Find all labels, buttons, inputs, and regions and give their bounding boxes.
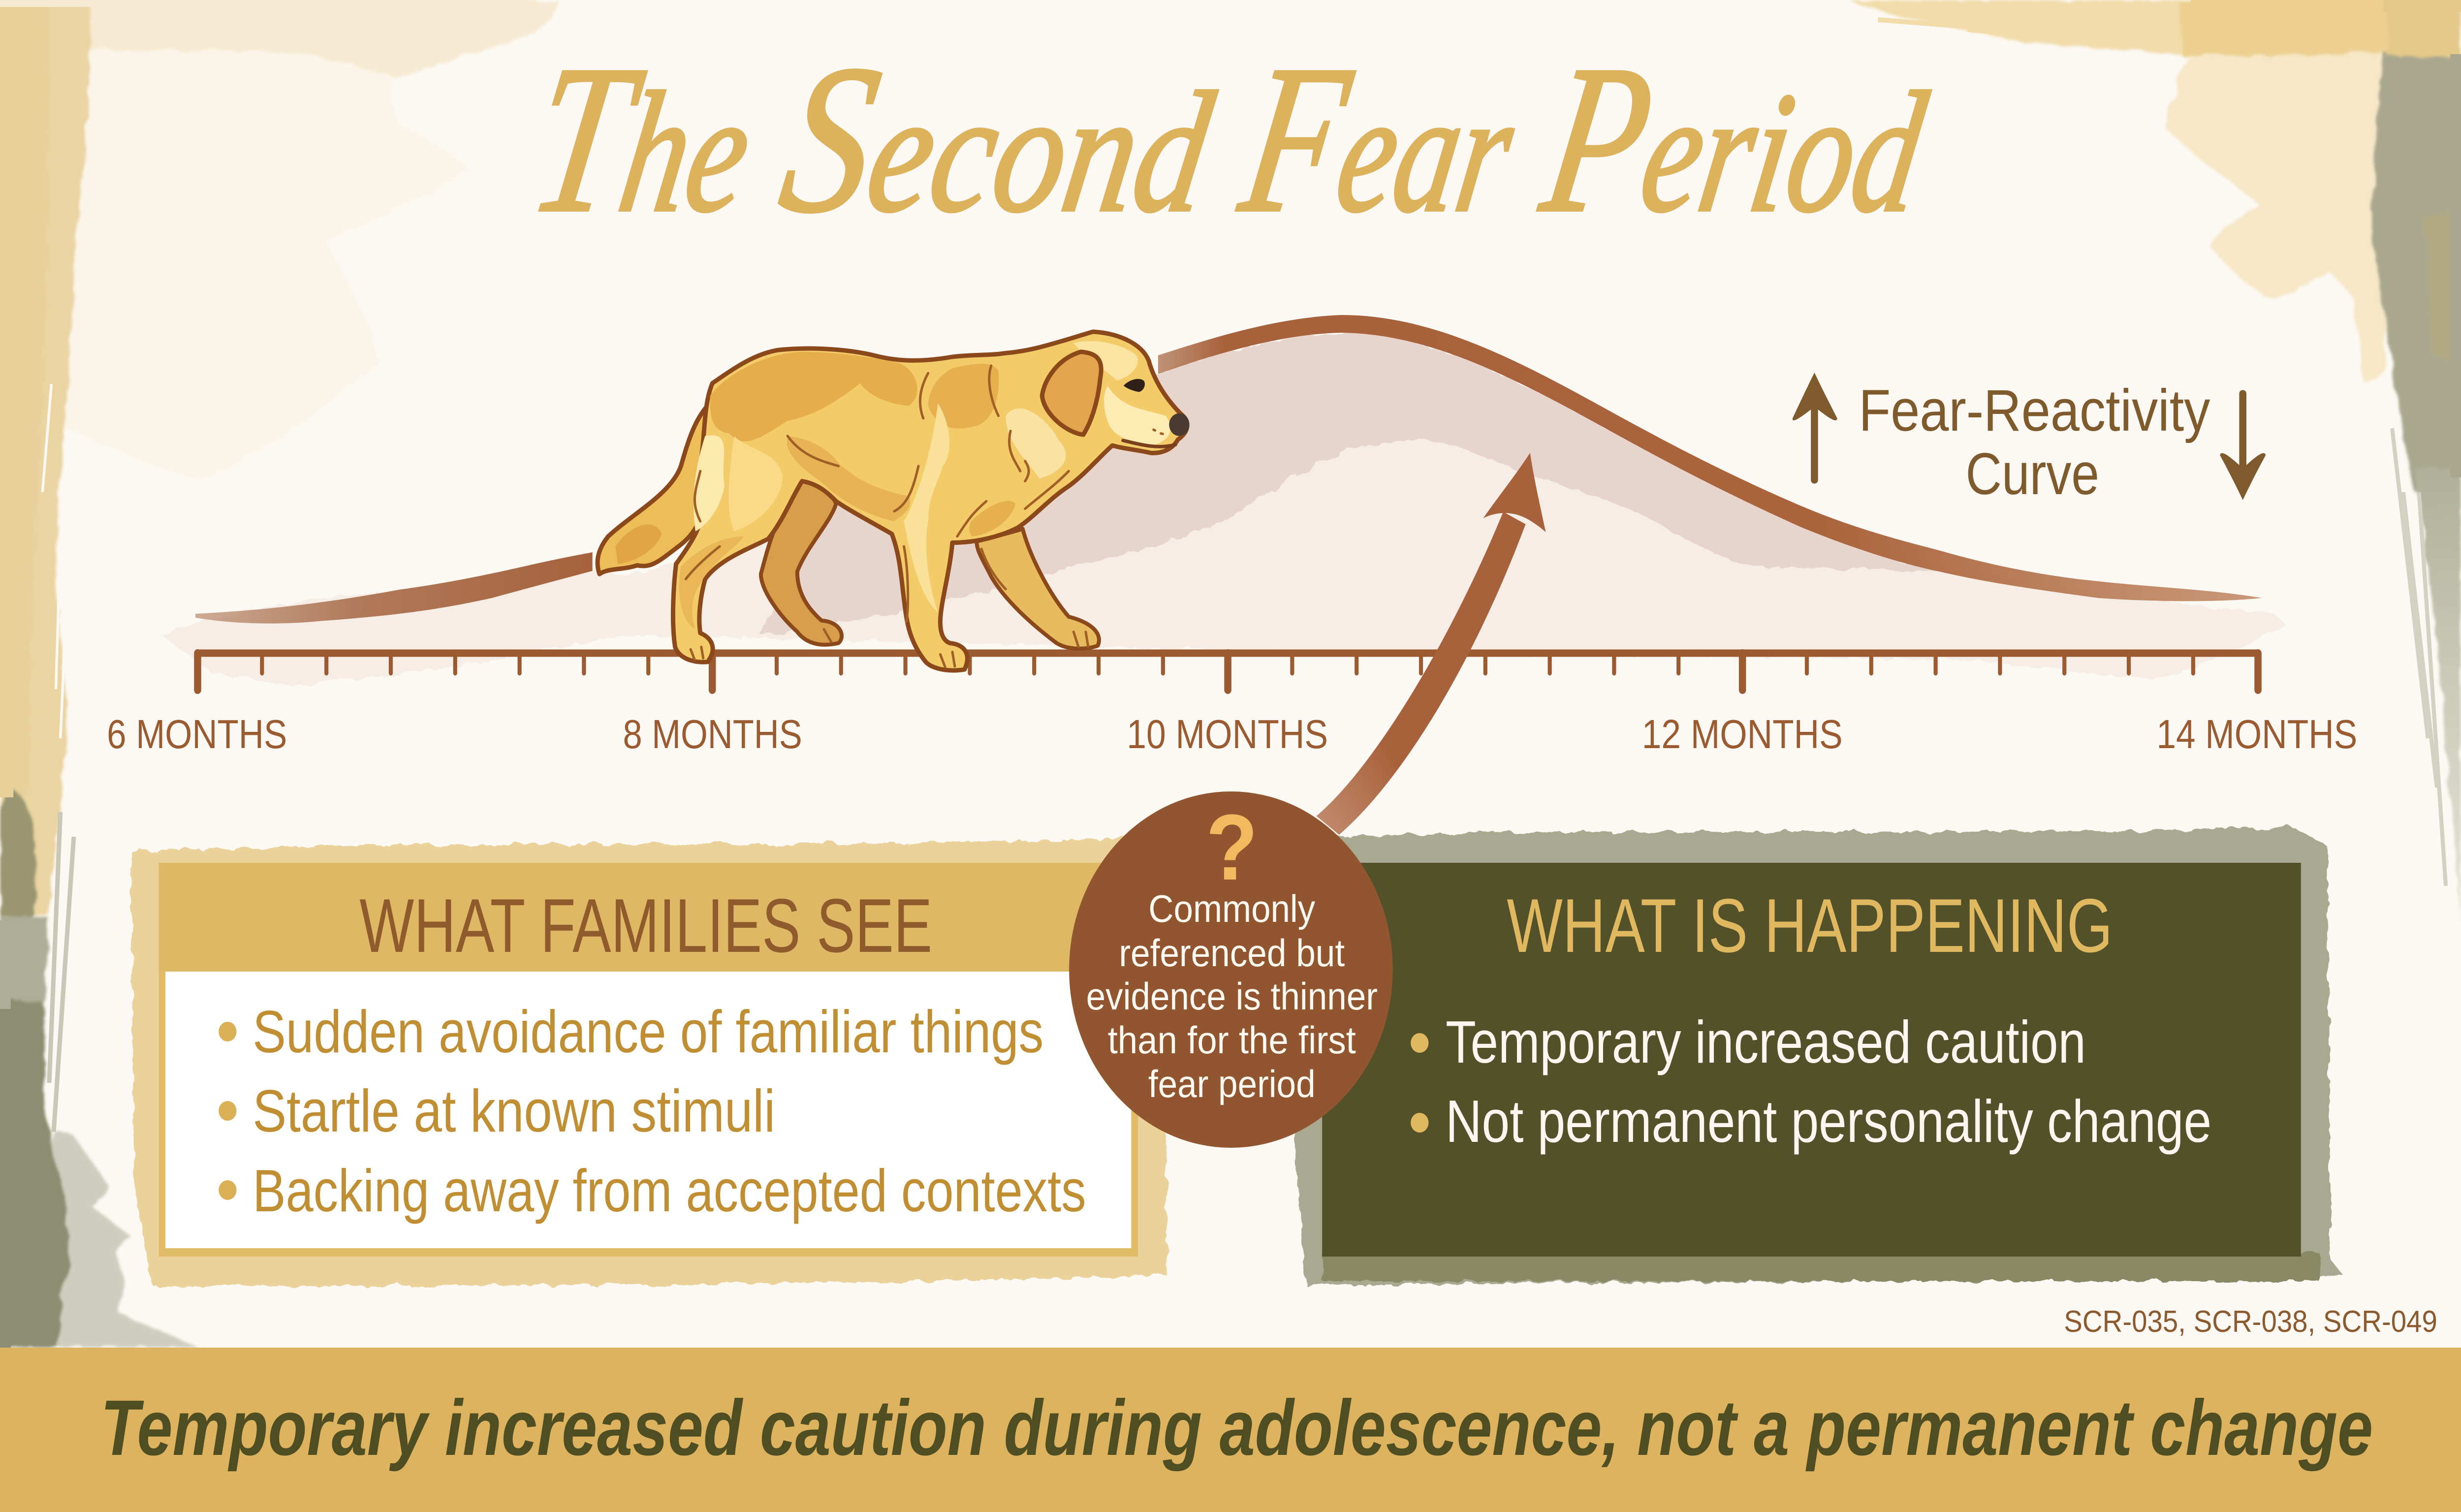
bullet list: Temporary increased caution	[1446, 1008, 2086, 1075]
axis labels	[107, 711, 2357, 757]
nose	[1169, 413, 1190, 436]
footer background	[0, 1348, 2461, 1512]
eye	[1124, 379, 1145, 392]
fur strokes	[686, 366, 1163, 622]
callout text: than for the first	[1108, 1019, 1356, 1062]
callout text: referenced but	[1119, 932, 1345, 975]
title: Fear	[1227, 22, 1533, 256]
fear-reactivity chart	[107, 315, 2357, 757]
bullet list: Backing away from accepted contexts	[252, 1157, 1086, 1224]
panel: what families see	[131, 837, 1167, 1286]
body and near legs	[673, 332, 1187, 670]
icon: up arrow	[1793, 373, 1837, 483]
curve wash: dark	[760, 333, 1939, 635]
callout text: evidence is thinner	[1086, 975, 1378, 1018]
curve: rising stroke	[195, 552, 593, 624]
mouth	[1123, 441, 1175, 446]
panel heading: WHAT IS HAPPENING	[1507, 883, 2113, 968]
callout: evidence note	[1069, 791, 1393, 1148]
panel frame	[158, 863, 1138, 1257]
icon: question mark: ?	[1206, 795, 1258, 900]
bullet list: Startle at known stimuli	[252, 1077, 775, 1144]
axis labels: 12 MONTHS	[1642, 711, 1843, 757]
axis labels: 6 MONTHS	[107, 711, 287, 757]
timeline axis	[198, 653, 2258, 690]
title: Second	[768, 22, 1230, 256]
arrow shaft	[1316, 512, 1526, 835]
bullet list: Not permanent personality change	[1446, 1087, 2211, 1155]
panel: what is happening	[1295, 827, 2343, 1286]
source references: SCR-035, SCR-038, SCR-049	[2064, 1304, 2437, 1339]
panel backing lower edge	[1322, 1253, 2319, 1281]
panel white body	[165, 972, 1131, 1248]
axis labels: 14 MONTHS	[2156, 711, 2357, 757]
panel heading: WHAT FAMILIES SEE	[359, 883, 932, 968]
golden retriever illustration	[598, 332, 1190, 670]
panel dark body	[1322, 863, 2301, 1257]
tail	[598, 401, 716, 574]
curve: falling stroke	[1158, 315, 2262, 601]
axis labels: 10 MONTHS	[1127, 711, 1328, 757]
footer band	[0, 1348, 2461, 1512]
panel backing wash	[1295, 827, 2343, 1286]
title: Period	[1528, 22, 1944, 256]
callout circle	[1069, 791, 1393, 1148]
curve label: Fear-Reactivity	[1859, 378, 2210, 443]
title: The	[518, 22, 768, 256]
curve label	[1859, 378, 2210, 507]
panel header band	[158, 863, 1138, 972]
arrow from callout up to curve	[1316, 453, 1546, 835]
bullet list	[1411, 1008, 2211, 1155]
axis labels: 8 MONTHS	[623, 711, 802, 757]
title	[518, 22, 1944, 256]
curve label: Curve	[1965, 441, 2099, 507]
callout text: Commonly	[1148, 887, 1316, 930]
far hind leg	[761, 481, 842, 645]
far front leg	[977, 529, 1099, 649]
fur wash patches	[615, 341, 1170, 630]
brush streaks	[42, 20, 2446, 1132]
arrow head	[1483, 453, 1546, 532]
panel backing wash	[131, 837, 1167, 1286]
icon: down arrow	[2220, 390, 2266, 500]
paw toes	[691, 630, 1088, 667]
ear	[1042, 352, 1101, 435]
callout text	[1086, 887, 1378, 1105]
callout text: fear period	[1148, 1063, 1316, 1105]
bullet list	[219, 998, 1086, 1224]
bullet list: Sudden avoidance of familiar things	[252, 998, 1043, 1065]
curve wash: light	[162, 359, 2286, 686]
